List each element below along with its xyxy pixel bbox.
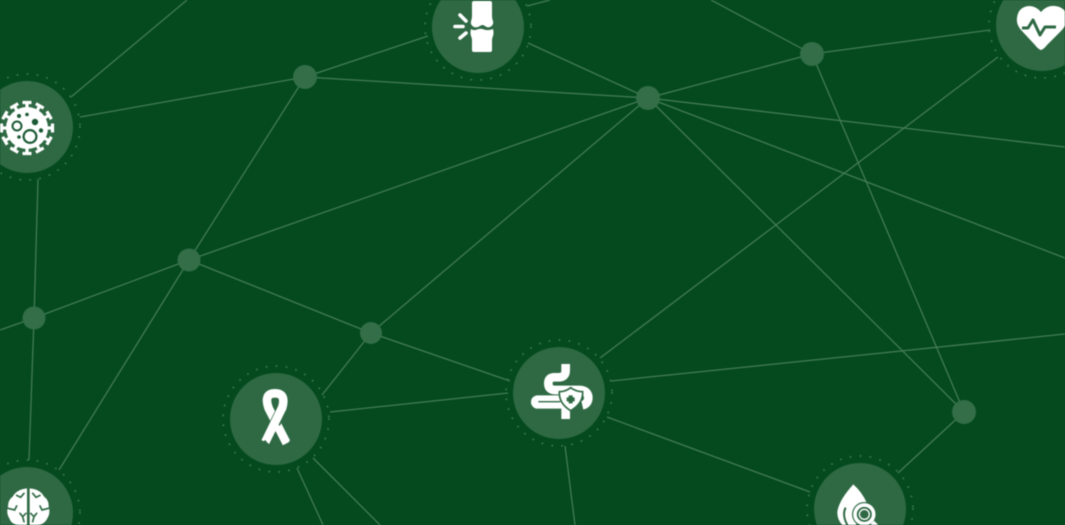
icon: intestine with shield: [506, 340, 612, 446]
icon: water drop with magnifier: [807, 456, 913, 525]
icon: virus: [0, 74, 80, 180]
small network nodes: [22, 42, 976, 424]
icon: awareness ribbon: [223, 366, 329, 472]
icon: brain: [0, 460, 80, 525]
icon: joint: [425, 0, 531, 80]
icon: heart with pulse: [989, 0, 1065, 78]
